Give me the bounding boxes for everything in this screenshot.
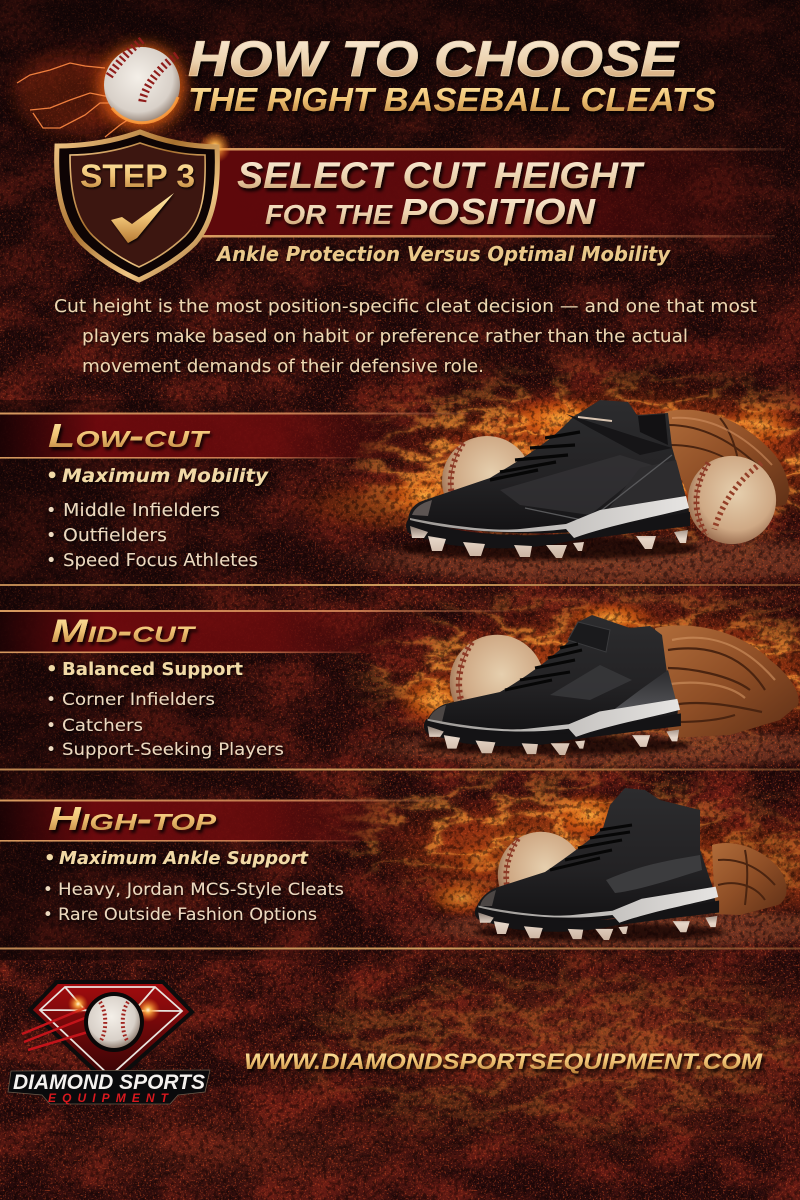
divider — [0, 584, 800, 586]
side panel highlight — [550, 665, 632, 700]
band top rule — [0, 412, 470, 414]
baseball — [450, 635, 544, 729]
scene: low-cut cleat — [400, 400, 789, 560]
band bottom rule — [0, 840, 360, 842]
scene: mid-cut cleat — [420, 615, 799, 755]
list — [46, 690, 284, 760]
heading: select cut height — [237, 155, 646, 232]
strap — [566, 414, 672, 455]
sole — [406, 496, 690, 558]
shield badge: step 3 — [57, 131, 231, 280]
list item: Speed Focus Athletes — [63, 551, 258, 571]
subheading: • — [44, 848, 56, 869]
lens flares — [68, 994, 88, 1014]
subheading: • — [46, 659, 58, 680]
title line 1: HOW TO CHOOSE — [188, 31, 680, 87]
subheading: Balanced Support — [62, 659, 243, 680]
list item: • — [43, 905, 53, 924]
list item: Rare Outside Fashion Options — [58, 905, 317, 924]
heading band — [0, 611, 440, 653]
icon: flaming baseball — [15, 40, 185, 137]
subheading: Maximum Ankle Support — [59, 848, 309, 869]
name banner — [8, 1070, 210, 1104]
toe highlight — [412, 500, 432, 516]
shadow — [475, 923, 725, 941]
collar heel panel — [600, 460, 688, 520]
subheading: Maximum Mobility — [62, 465, 270, 487]
logo: diamond sports equipment — [8, 982, 210, 1105]
speed trails — [22, 1008, 88, 1050]
diamond — [30, 982, 192, 1085]
heading: High-top — [48, 800, 217, 837]
heading line 2: FOR THE — [265, 199, 393, 230]
panel: high-top — [0, 800, 440, 924]
step label: STEP 3 — [80, 158, 195, 194]
list — [46, 501, 258, 571]
swoosh panel — [606, 855, 702, 893]
icon: checkmark — [111, 193, 174, 243]
lens flare right — [136, 998, 160, 1022]
divider — [0, 768, 800, 770]
list item: • — [46, 501, 56, 521]
step banner band — [200, 150, 790, 235]
baseball left — [442, 436, 532, 526]
band bottom rule — [0, 652, 360, 653]
intro paragraph — [54, 296, 757, 377]
intro line 2: players make based on habit or preference rather than the actual — [82, 326, 688, 347]
list item: Middle Infielders — [63, 501, 220, 521]
shadow — [400, 536, 700, 560]
wordmark: DIAMOND SPORTS — [13, 1071, 205, 1094]
title — [188, 31, 716, 118]
heading line 2: POSITION — [400, 191, 596, 232]
scene: high-top cleat — [475, 788, 787, 941]
list item: • — [46, 551, 56, 571]
toe highlight — [428, 705, 446, 722]
heading line 1: SELECT CUT HEIGHT — [237, 155, 646, 196]
website url: WWW.DIAMONDSPORTSEQUIPMENT.COM — [244, 1049, 763, 1074]
list item: Outfielders — [63, 526, 167, 546]
sole — [424, 699, 681, 755]
cleat upper — [408, 400, 690, 533]
list item: • — [46, 716, 56, 736]
baseball — [498, 832, 584, 918]
strap logo — [578, 417, 612, 421]
heading band — [0, 414, 440, 458]
cleat upper — [475, 788, 716, 922]
title line 2: THE RIGHT BASEBALL CLEATS — [188, 81, 716, 118]
list — [43, 880, 344, 924]
toe highlight — [480, 890, 496, 906]
list item: • — [46, 740, 56, 760]
laces — [490, 432, 580, 480]
collar heel panel — [600, 670, 678, 720]
step banner bottom rule — [200, 235, 775, 238]
sole — [475, 887, 719, 940]
list item: Catchers — [62, 716, 143, 736]
glove — [665, 410, 789, 510]
subheading: • — [46, 465, 58, 487]
shadow — [420, 735, 690, 755]
baseball right — [688, 456, 776, 544]
intro line 3: movement demands of their defensive role. — [82, 356, 484, 377]
list item: Support-Seeking Players — [62, 740, 284, 760]
side panel highlight — [500, 455, 652, 515]
cleat upper — [424, 615, 678, 736]
glove — [712, 843, 787, 915]
laces — [550, 825, 632, 870]
baseball — [84, 992, 144, 1052]
hot fire spots — [380, 396, 800, 918]
list item: • — [46, 690, 56, 710]
intro line 1: Cut height is the most position-specific cleat decision — and one that most — [54, 296, 757, 317]
collar opening — [638, 414, 668, 445]
ankle strap — [568, 622, 610, 652]
panel: low-cut — [0, 412, 470, 571]
heading: Low-cut — [48, 417, 211, 454]
divider — [0, 948, 800, 950]
list item: Heavy, Jordan MCS-Style Cleats — [58, 880, 344, 899]
sub wordmark: EQUIPMENT — [48, 1091, 170, 1105]
subtitle: Ankle Protection Versus Optimal Mobility — [215, 242, 671, 266]
heading band — [0, 801, 430, 841]
panel: mid-cut — [0, 610, 510, 760]
band top rule — [0, 800, 440, 802]
band bottom rule — [0, 457, 360, 459]
list item: • — [43, 880, 53, 899]
laces — [505, 644, 582, 690]
band top rule — [0, 610, 510, 612]
glove — [655, 625, 799, 738]
list item: Corner Infielders — [62, 690, 215, 710]
list item: • — [46, 526, 56, 546]
lightning trails — [17, 63, 135, 137]
heading: Mid-cut — [51, 613, 196, 649]
step banner top rule — [215, 148, 785, 150]
